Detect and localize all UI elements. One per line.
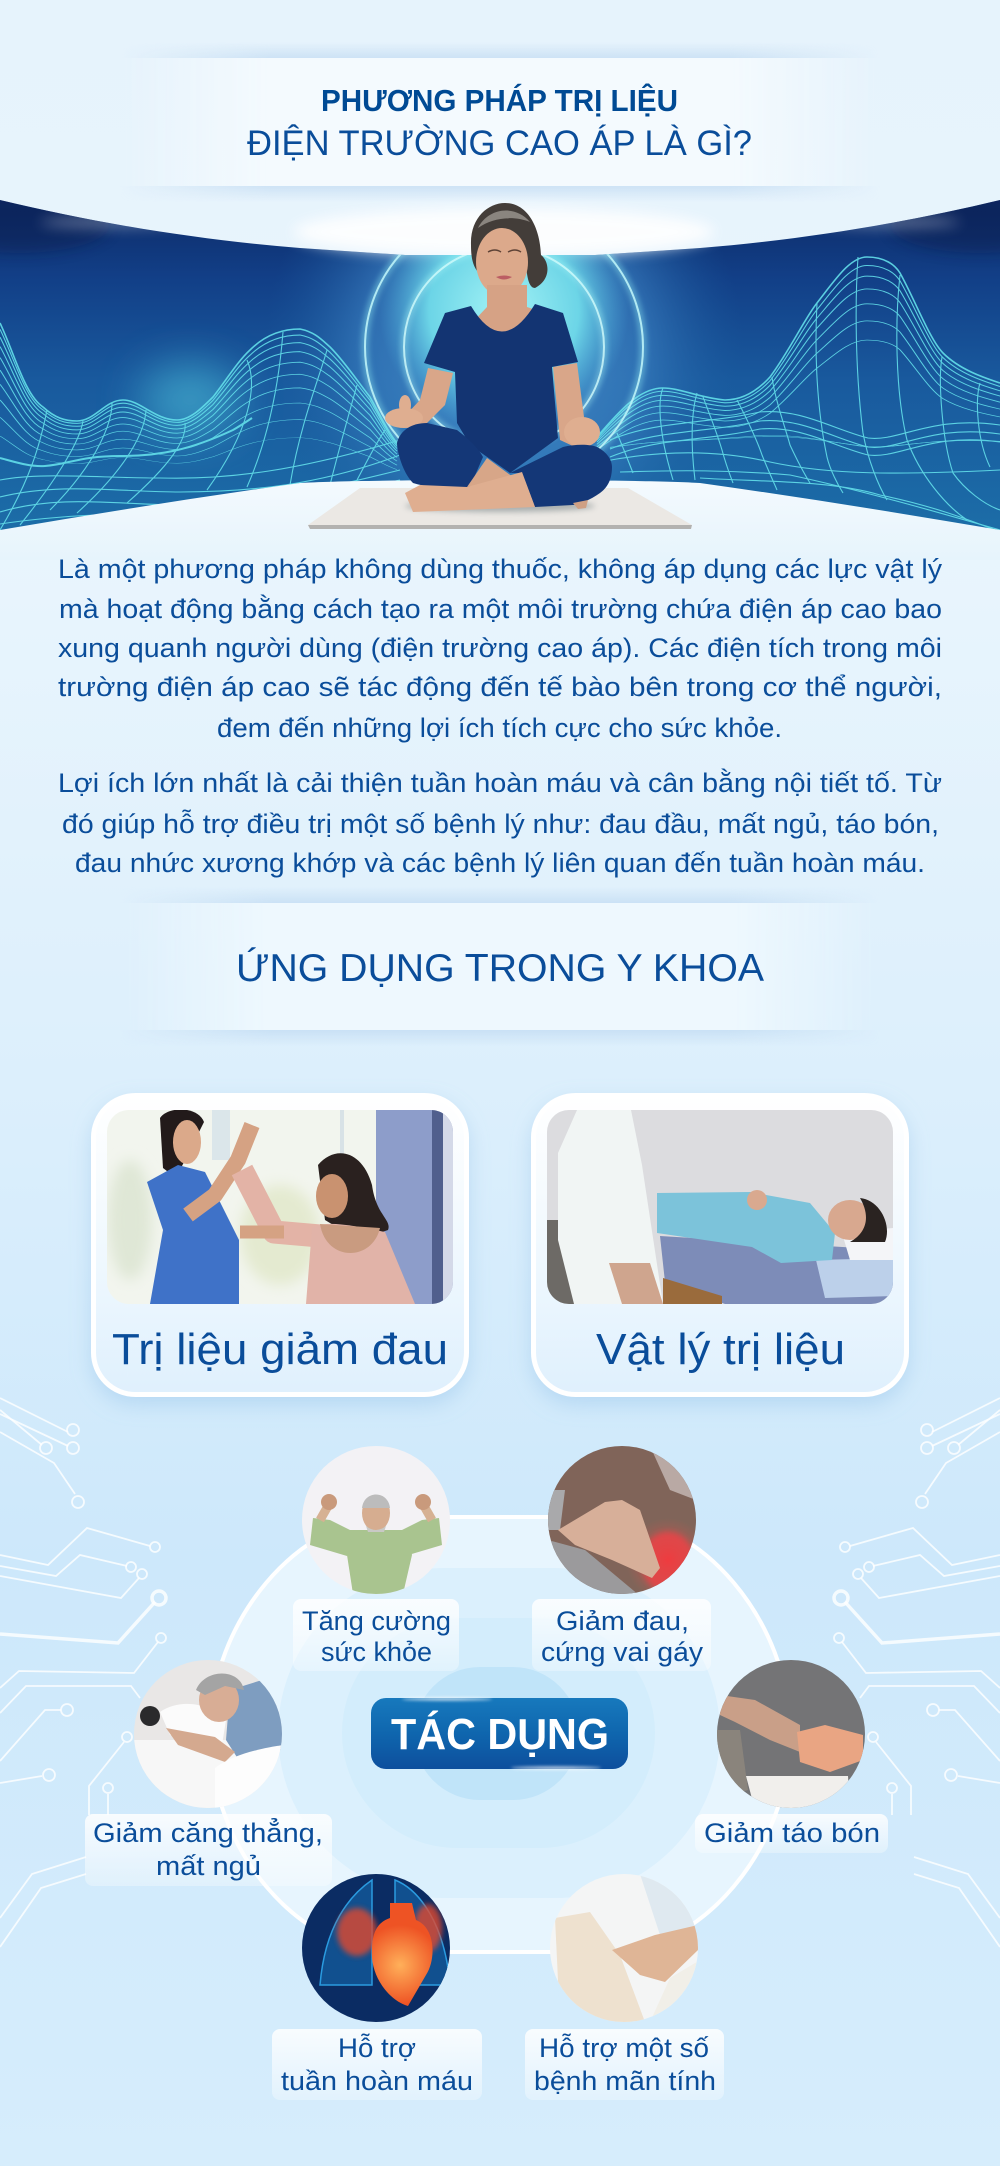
face and neck: [476, 228, 528, 296]
hero dark background: [0, 190, 1000, 540]
hair: [471, 203, 547, 288]
label box: [85, 1814, 332, 1886]
label text: [302, 1606, 451, 1667]
label box: [695, 1814, 888, 1853]
photo: hand on painful shoulder: [548, 1446, 700, 1600]
label text: tuần hoàn máu: [281, 2066, 473, 2096]
intro paragraph 1: trường điện áp cao sẽ tác động đến tế bào bên trong cơ thể người,: [58, 672, 942, 702]
label text: Giảm căng thẳng,: [93, 1816, 323, 1848]
label text: Giảm táo bón: [704, 1818, 880, 1848]
label text: Giảm đau,: [556, 1606, 689, 1636]
label text: [534, 2032, 716, 2096]
photo: man sleeping: [134, 1660, 284, 1810]
label text: Hỗ trợ một số: [539, 2032, 709, 2063]
wave mesh left: [0, 323, 400, 530]
intro paragraph 2: [58, 767, 942, 878]
intro paragraph 1: [58, 554, 943, 743]
intro paragraph 2: Lợi ích lớn nhất là cải thiện tuần hoàn máu và cân bằng nội tiết tố. Từ: [58, 767, 942, 798]
label box: [272, 2029, 482, 2100]
card: pain relief therapy: [94, 1096, 466, 1394]
section heading: ỨNG DỤNG TRONG Y KHOA: [236, 947, 764, 990]
label text: [541, 1606, 704, 1667]
title line 1: PHƯƠNG PHÁP TRỊ LIỆU: [321, 82, 678, 118]
card label: Vật lý trị liệu: [596, 1325, 845, 1374]
label box: [525, 2029, 724, 2100]
label text: [93, 1816, 323, 1881]
intro paragraph 1: đem đến những lợi ích tích cực cho sức khỏe.: [217, 713, 782, 743]
effects center button: [371, 1698, 628, 1770]
effect: stress and insomnia relief: [85, 1660, 332, 1886]
label text: sức khỏe: [321, 1637, 432, 1667]
circuit lines right: [834, 1398, 1000, 1947]
effect: blood circulation support: [272, 1874, 482, 2100]
photo: doctor holding patient hand: [550, 1874, 700, 2022]
card label: Trị liệu giảm đau: [112, 1325, 448, 1374]
label text: cứng vai gáy: [541, 1637, 704, 1667]
title line 2: ĐIỆN TRƯỜNG CAO ÁP LÀ GÌ?: [247, 124, 752, 163]
label text: mất ngủ: [156, 1851, 261, 1881]
effect: constipation relief: [695, 1660, 888, 1853]
effect: shoulder pain relief: [532, 1446, 711, 1671]
photo: glowing heart and lungs: [302, 1874, 450, 2022]
label text: bệnh mãn tính: [534, 2066, 716, 2096]
circuit lines left: [0, 1398, 166, 1947]
effects diagram rings: [210, 1517, 790, 1952]
card: physical therapy: [534, 1096, 906, 1394]
intro paragraph 2: đó giúp hỗ trợ điều trị một số bệnh lý như: đau đầu, mất ngủ, táo bón,: [62, 808, 939, 839]
label text: Tăng cường: [302, 1606, 451, 1636]
meditating woman: [385, 203, 612, 512]
effects center button: TÁC DỤNG: [391, 1709, 609, 1759]
exercise mat: [308, 488, 692, 529]
intro paragraph 1: xung quanh người dùng (điện trường cao áp). Các điện tích trong môi: [58, 633, 942, 663]
effect: stronger health: [293, 1444, 459, 1671]
label text: Hỗ trợ: [338, 2032, 416, 2063]
wave mesh right: [597, 257, 1000, 532]
energy halo: [358, 254, 650, 452]
intro paragraph 1: mà hoạt động bằng cách tạo ra một môi trường chứa điện áp cao bao: [59, 593, 942, 624]
title band: [170, 47, 830, 198]
label text: [281, 2032, 473, 2096]
section heading band: [173, 893, 825, 1040]
white bloom above figure: [294, 208, 714, 256]
label box: [293, 1599, 459, 1671]
photo: man flexing: [300, 1444, 452, 1596]
effect: chronic disease support: [525, 1874, 724, 2100]
intro paragraph 2: đau nhức xương khớp và các bệnh lý liên quan đến tuần hoàn máu.: [75, 848, 925, 878]
label box: [532, 1599, 711, 1671]
shirt: [424, 304, 578, 473]
white dome floor: [0, 480, 1000, 560]
crossed legs: [397, 423, 483, 488]
photo: hands on stomach: [717, 1660, 865, 1810]
arms and hands: [403, 368, 453, 427]
intro paragraph 1: Là một phương pháp không dùng thuốc, không áp dụng các lực vật lý: [58, 554, 943, 584]
photo: nurse assisting patient: [107, 1109, 453, 1304]
hero banner: [0, 200, 1000, 530]
photo: patient lying on therapy bed: [547, 1110, 893, 1304]
